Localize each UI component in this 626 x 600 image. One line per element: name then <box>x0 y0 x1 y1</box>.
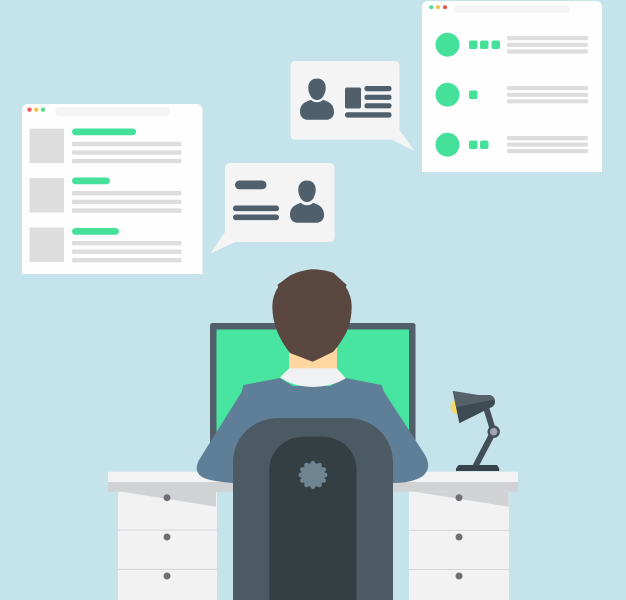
right drawers <box>409 491 509 600</box>
hair <box>272 269 352 362</box>
panel: upper speech bubble with profile card <box>290 61 414 151</box>
jacket <box>197 378 428 483</box>
window controls <box>429 5 447 9</box>
rating row 3 <box>436 133 588 157</box>
lamp joint <box>488 426 500 438</box>
left drawers <box>118 491 217 600</box>
icon: person <box>300 78 334 120</box>
shirt collar <box>280 368 346 387</box>
lamp arm <box>475 404 494 467</box>
panel: left browser window <box>22 104 202 274</box>
panel: lower speech bubble with profile card <box>210 163 334 254</box>
monitor <box>210 323 416 454</box>
rating row 1 <box>436 33 588 57</box>
panel: top right browser window <box>422 1 602 172</box>
lamp bulb <box>450 400 464 414</box>
icon: id card lines <box>345 86 392 118</box>
chair inner panel <box>269 437 356 600</box>
window controls <box>27 108 45 112</box>
lamp shade <box>453 391 495 423</box>
desk <box>108 472 518 600</box>
icon: person <box>290 180 324 223</box>
list item 2 <box>30 178 182 213</box>
address bar <box>454 5 570 13</box>
desktop surface <box>108 472 518 492</box>
icon: desk lamp <box>450 391 500 471</box>
neck <box>289 340 337 372</box>
chair back <box>233 418 393 600</box>
address bar <box>55 107 170 116</box>
list item 3 <box>30 228 182 262</box>
list item 1 <box>30 128 182 163</box>
lamp base <box>456 465 499 471</box>
chair gear knob <box>298 461 328 489</box>
office chair <box>233 418 393 600</box>
text placeholder bars <box>233 180 279 220</box>
rating row 2 <box>436 83 588 107</box>
